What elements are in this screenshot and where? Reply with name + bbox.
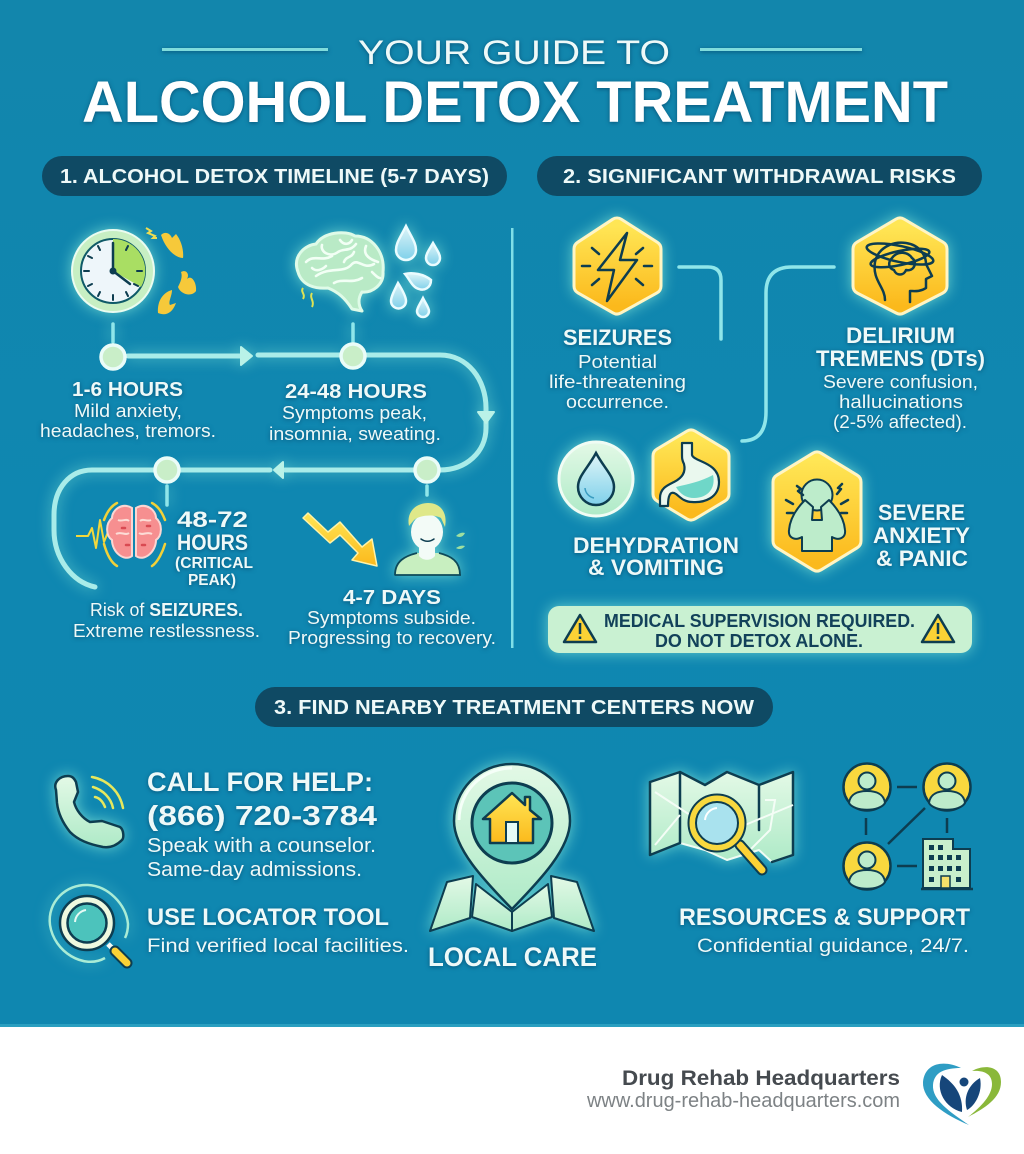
label: severe anxiety and panic: & PANIC <box>876 546 968 571</box>
label: severe anxiety and panic <box>873 500 970 571</box>
label: delirium tremens: hallucinations <box>839 392 963 412</box>
heading: section 2 <box>537 156 982 196</box>
icon: brain with sweat drops <box>296 226 440 317</box>
icon: stomach <box>660 438 721 512</box>
label: delirium tremens <box>816 323 985 432</box>
timeline node: 1-6 hours <box>101 345 125 369</box>
footer brand text: Drug Rehab Headquarters <box>622 1067 900 1090</box>
callout: medical supervision: DO NOT DETOX ALONE. <box>655 631 863 651</box>
footer brand text: www.drug-rehab-headquarters.com <box>586 1090 900 1112</box>
label: 24-48 hours: Symptoms peak, <box>282 403 427 423</box>
label: seizure risk: Extreme restlessness. <box>73 621 260 641</box>
icon: anxious figure <box>781 460 853 563</box>
label: 4-7 days: 4-7 DAYS <box>343 587 441 609</box>
label: delirium tremens: TREMENS (DTs) <box>816 346 985 371</box>
label: local care: LOCAL CARE <box>428 942 597 972</box>
icon: locator magnifier <box>50 885 128 963</box>
label: 4-7 days <box>288 587 496 648</box>
icon: person bottom left <box>844 842 890 890</box>
timeline node: 4-7 days <box>415 458 439 482</box>
icon: support network <box>844 764 973 890</box>
icon: phone <box>55 776 123 847</box>
label: 48-72 hours: 48-72 <box>177 507 248 532</box>
panel: withdrawal risks <box>548 226 985 653</box>
label: 24-48 hours: 24-48 HOURS <box>285 381 427 403</box>
text: resources and support <box>679 904 970 957</box>
heading: section 3 <box>255 687 773 727</box>
heading: section 1 <box>42 156 507 196</box>
label: seizures: occurrence. <box>566 392 669 412</box>
text: resources and support: RESOURCES & SUPPORT <box>679 904 970 931</box>
timeline path with arrows <box>54 324 494 587</box>
title <box>82 34 948 135</box>
panel: timeline <box>40 226 496 648</box>
label: severe anxiety and panic: ANXIETY <box>873 523 970 548</box>
icon: person top left <box>844 764 890 810</box>
label: dehydration and vomiting <box>573 533 739 580</box>
icon: building <box>921 839 973 889</box>
icon: recovering person <box>394 503 465 575</box>
label: 48-72 hours: PEAK) <box>188 572 236 589</box>
icon: clock with flames <box>72 228 196 314</box>
label: 24-48 hours <box>269 381 441 444</box>
label: delirium tremens: (2-5% affected). <box>833 412 967 432</box>
label: delirium tremens: Severe confusion, <box>823 372 978 392</box>
label: severe anxiety and panic: SEVERE <box>878 500 965 525</box>
text: call for help: CALL FOR HELP: <box>147 767 373 797</box>
label: 4-7 days: Progressing to recovery. <box>288 628 496 648</box>
footer brand text <box>586 1067 900 1112</box>
icon: dehydration drop <box>559 442 633 516</box>
icon: descending arrow <box>303 513 377 566</box>
label: 4-7 days: Symptoms subside. <box>307 608 476 628</box>
title: ALCOHOL DETOX TREATMENT <box>82 70 948 135</box>
label: seizures: life-threatening <box>549 372 686 392</box>
text: use locator tool: USE LOCATOR TOOL <box>147 904 389 931</box>
text: call for help <box>147 767 378 881</box>
text: call for help: Speak with a counselor. <box>147 835 376 857</box>
icon: local care map pin <box>430 764 594 931</box>
text: resources and support: Confidential guidance, 24/7. <box>697 936 969 957</box>
text: call for help: (866) 720-3784 <box>147 800 378 831</box>
icon: delirium head <box>861 226 939 306</box>
icon: warning triangle right <box>922 615 954 642</box>
connector lines <box>679 267 834 441</box>
icon: inflamed brain with pulse <box>76 503 165 566</box>
icon: person top right <box>924 764 970 810</box>
label: 1-6 hours <box>40 379 216 441</box>
label: 48-72 hours: HOURS <box>177 530 248 555</box>
heading: section 2: 2. SIGNIFICANT WITHDRAWAL RISKS <box>563 165 956 188</box>
label: 48-72 hours: (CRITICAL <box>175 555 253 572</box>
callout: medical supervision <box>548 606 972 653</box>
timeline node: 48-72 hours <box>155 458 179 482</box>
label: 24-48 hours: insomnia, sweating. <box>269 424 441 444</box>
label: seizure risk: Risk of SEIZURES. <box>90 600 243 620</box>
label: seizure risk <box>73 600 260 641</box>
label: 48-72 hours <box>175 507 253 589</box>
heading: section 1: 1. ALCOHOL DETOX TIMELINE (5-7 DAYS) <box>60 165 489 188</box>
label: seizures: Potential <box>578 352 657 372</box>
label: seizures <box>549 325 686 412</box>
timeline node: 24-48 hours <box>341 344 365 368</box>
title: YOUR GUIDE TO <box>358 34 670 72</box>
label: 1-6 hours: 1-6 HOURS <box>72 379 183 401</box>
label: dehydration and vomiting: DEHYDRATION <box>573 533 739 558</box>
label: seizures: SEIZURES <box>563 325 672 350</box>
icon: map with magnifier <box>650 772 793 870</box>
heading: section 3: 3. FIND NEARBY TREATMENT CENTERS NOW <box>274 696 755 719</box>
icon: warning triangle left <box>564 615 596 642</box>
label: 1-6 hours: Mild anxiety, <box>74 401 182 421</box>
text: call for help: Same-day admissions. <box>147 859 362 881</box>
label: dehydration and vomiting: & VOMITING <box>588 555 724 580</box>
label: delirium tremens: DELIRIUM <box>846 323 955 348</box>
panel: treatment centers <box>50 764 973 972</box>
text: use locator tool <box>147 904 409 957</box>
callout: medical supervision: MEDICAL SUPERVISION REQUIRED. <box>604 611 915 631</box>
icon: footer logo heart <box>923 1064 1001 1125</box>
label: 1-6 hours: headaches, tremors. <box>40 421 216 441</box>
icon: seizure bolt <box>582 226 653 306</box>
text: use locator tool: Find verified local facilities. <box>147 936 409 957</box>
